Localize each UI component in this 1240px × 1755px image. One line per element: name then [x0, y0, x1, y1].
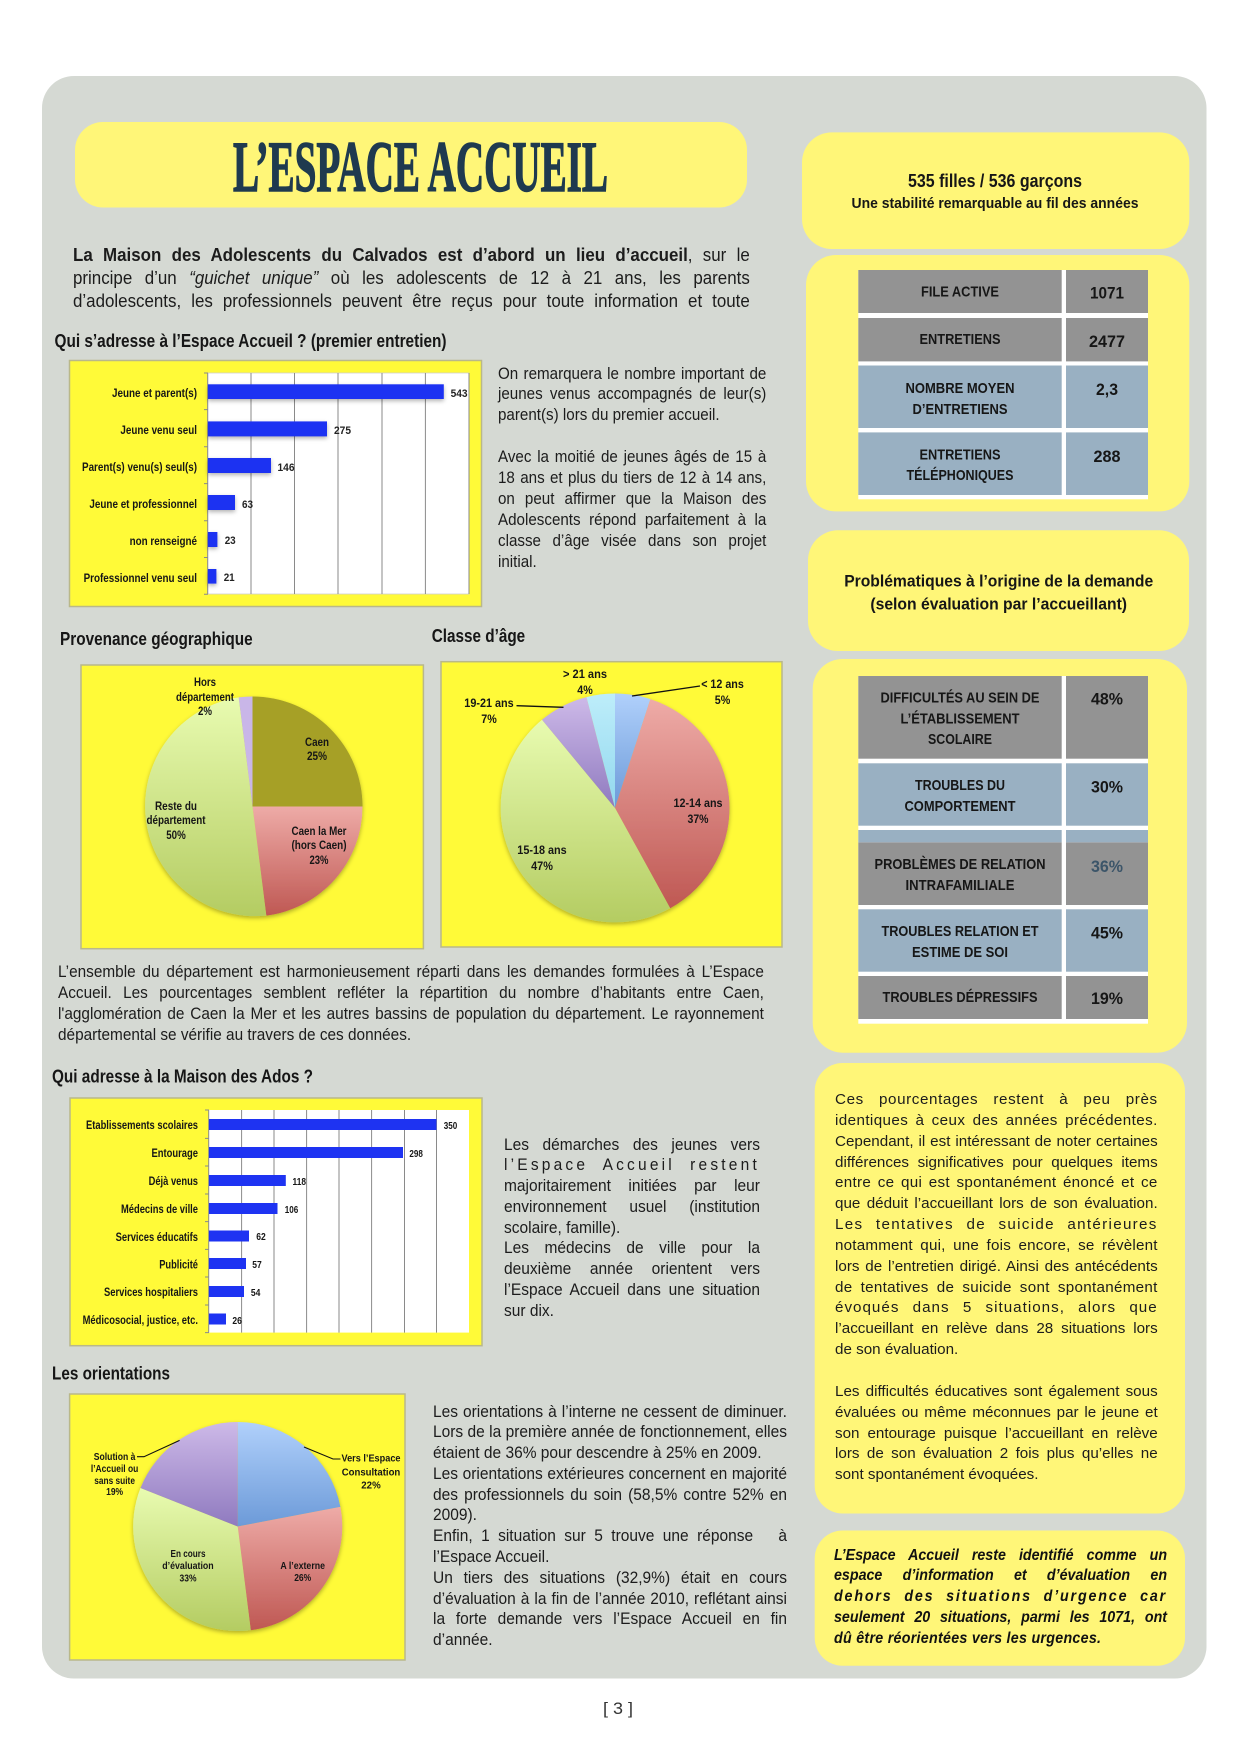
text: commentaire pourcentages: évoqués dans 5 situations, alors que: [835, 1299, 1158, 1316]
pie chart: classe d'age: 7%: [481, 712, 497, 726]
text: conclusion: dû être réorientées vers les urgences.: [834, 1630, 1101, 1647]
text: introduction: La Maison des Adolescents du Calvados est d’abord un lieu d’accueil, sur le: [72, 245, 749, 265]
pie chart: classe d'age: [441, 662, 782, 947]
text: orientations: d’évaluation à la fin de l’année 2010, reflétant ainsi: [433, 1590, 787, 1608]
text: commentaire pourcentages: Les tentatives de suicide antérieures: [835, 1216, 1158, 1233]
panel: chiffres clés: 2477: [1089, 332, 1125, 351]
panel: tableau problématiques: 36%: [1091, 857, 1123, 876]
bar chart: qui adresse: 62: [256, 1232, 266, 1243]
pie chart: provenance: Reste du: [155, 799, 197, 813]
bar chart: qui s'adresse: 63: [242, 499, 253, 511]
panel: tableau problématiques: TROUBLES DU: [915, 777, 1005, 794]
heading: provenance: Provenance géographique: [60, 629, 253, 649]
pie chart: provenance: Hors: [194, 675, 216, 689]
text: commentaire accompagnés: jeunes venus accompagnés de leur(s): [498, 385, 766, 403]
text: commentaire pourcentages: notamment qui, une fois encore, se révèlent: [835, 1237, 1158, 1254]
bar chart: qui adresse: [70, 1098, 482, 1346]
pie chart: orientations: Consultation: [342, 1468, 400, 1478]
pie chart: provenance: département: [176, 690, 234, 704]
text: orientations: d’année.: [433, 1631, 493, 1649]
bar chart: qui adresse: 118: [292, 1177, 306, 1188]
text: introduction: d’adolescents, les professionnels peuvent être reçus pour toute information et toute: [72, 291, 749, 311]
text: commentaire pourcentages: son entourage puisque l’accueillant en relève: [835, 1424, 1158, 1442]
text: commentaire pourcentages: différences significatives pour quelques items: [835, 1154, 1158, 1171]
bar chart: qui s'adresse: Jeune et parent(s): [112, 386, 197, 400]
text: commentaire pourcentages: évaluées ou même méconnues par le jeune et: [835, 1404, 1158, 1421]
pie chart: orientations: 26%: [294, 1573, 311, 1584]
panel: chiffres clés: [806, 255, 1189, 511]
panel: chiffres clés: TÉLÉPHONIQUES: [906, 467, 1014, 484]
bar chart: qui s'adresse: 543: [451, 388, 468, 400]
panel: commentaire: [815, 1063, 1185, 1514]
panel: tableau problématiques: COMPORTEMENT: [904, 798, 1016, 815]
pie chart: orientations: Solution à: [94, 1452, 136, 1463]
panel: chiffres clés: D’ENTRETIENS: [912, 401, 1008, 418]
bar chart: qui adresse: Médicosocial, justice, etc.: [83, 1313, 198, 1327]
text: commentaire accompagnés: Adolescents répond parfaitement à la: [498, 511, 766, 529]
pie chart: orientations: Vers l’Espace: [342, 1454, 401, 1464]
text: commentaire accompagnés: initial.: [498, 553, 536, 571]
pie chart: orientations: 33%: [180, 1574, 197, 1584]
pie chart: orientations: l’Accueil ou: [91, 1464, 138, 1475]
panel: chiffres clés: ENTRETIENS: [920, 331, 1000, 348]
bar chart: qui adresse: 57: [252, 1260, 262, 1271]
text: commentaire pourcentages: de tentatives de suicide sont spontanément: [835, 1279, 1158, 1296]
panel: problématiques titre: (selon évaluation par l’accueillant): [870, 594, 1127, 614]
text: orientations: 2009).: [433, 1506, 477, 1524]
text: commentaire pourcentages: sont spontanément évoquées.: [835, 1466, 1038, 1483]
text: commentaire pourcentages: [835, 1091, 1158, 1483]
text: commentaire pourcentages: lors de son évaluation 2 fois plus qu’elles ne: [835, 1445, 1158, 1462]
pie chart: orientations: En cours: [170, 1549, 206, 1560]
bar chart: qui s'adresse: 275: [334, 425, 351, 437]
text: commentaire pourcentages: Cependant, il est intéressant de noter certaines: [835, 1133, 1158, 1150]
panel: tableau problématiques: [813, 659, 1187, 1053]
text: orientations: Les orientations extérieures concernent en majorité: [433, 1465, 787, 1483]
bar chart: qui adresse: Services hospitaliers: [104, 1285, 198, 1299]
pie chart: provenance: département: [146, 813, 206, 827]
text: démarches: environnement usuel (institution: [504, 1198, 760, 1216]
text: commentaire accompagnés: on peut affirmer que la Maison des: [498, 490, 766, 508]
bar chart: qui s'adresse: [70, 360, 482, 606]
text: orientations: Un tiers des situations (32,9%) était en cours: [433, 1569, 787, 1587]
bar chart: qui adresse: 54: [251, 1288, 261, 1299]
text: commentaire pourcentages: identiques à ceux des années précédentes.: [835, 1112, 1158, 1129]
bar chart: qui s'adresse: Professionnel venu seul: [84, 571, 197, 585]
page number: [ 3 ]: [603, 1699, 633, 1718]
text: démarches: scolaire, famille).: [504, 1219, 620, 1237]
panel: chiffres clés: FILE ACTIVE: [921, 284, 999, 300]
bar chart: qui s'adresse: non renseigné: [130, 534, 197, 548]
bar chart: qui s'adresse: 21: [224, 572, 235, 584]
panel: chiffres clés: 2,3: [1096, 380, 1118, 399]
panel: tableau problématiques: PROBLÈMES DE RELATION: [874, 856, 1046, 873]
text: commentaire pourcentages: lors de l’entretien dirigé. Ainsi des antécédents: [835, 1258, 1158, 1275]
text: conclusion: espace d’information et d’évaluation en: [834, 1567, 1167, 1584]
text: commentaire pourcentages: que déduit l’accueillant lors de son évaluation.: [835, 1195, 1158, 1212]
text: démarches: sur dix.: [504, 1302, 554, 1320]
text: conclusion: seulement 20 situations, parmi les 1071, ont: [834, 1609, 1167, 1626]
pie chart: provenance: 50%: [166, 828, 186, 842]
bar chart: qui adresse: 106: [285, 1205, 299, 1216]
bar chart: qui adresse: Médecins de ville: [121, 1202, 198, 1216]
pie chart: orientations: [70, 1394, 405, 1660]
pie chart: orientations: 19%: [106, 1487, 123, 1498]
text: commentaire accompagnés: 18 ans et plus du tiers de 12 à 14 ans,: [498, 469, 766, 487]
text: conclusion: [834, 1547, 1168, 1647]
bar chart: qui s'adresse: 146: [278, 462, 294, 474]
bar chart: qui adresse: Services éducatifs: [116, 1230, 198, 1244]
text: département: départemental se vérifie au travers de ces données.: [58, 1026, 411, 1044]
text: orientations: Lors de la première année de fonctionnement, elles: [433, 1423, 787, 1441]
panel: tableau problématiques: 19%: [1091, 989, 1123, 1008]
panel: filles garçons: Une stabilité remarquable au fil des années: [852, 196, 1138, 212]
pie chart: provenance: 23%: [310, 853, 329, 867]
text: introduction: principe d’un “guichet unique” où les adolescents de 12 à 21 ans, les parents: [72, 268, 749, 288]
panel: tableau problématiques: TROUBLES DÉPRESSIFS: [882, 989, 1038, 1006]
text: commentaire accompagnés: [498, 364, 766, 571]
text: commentaire accompagnés: parent(s) lors du premier accueil.: [498, 406, 719, 424]
pie chart: provenance: Caen: [305, 735, 329, 749]
heading: les orientations: Les orientations: [52, 1364, 170, 1384]
bar chart: qui adresse: 350: [444, 1121, 458, 1132]
text: commentaire accompagnés: Avec la moitié de jeunes âgés de 15 à: [498, 448, 766, 466]
pie chart: classe d'age: 15-18 ans: [517, 843, 567, 857]
bar chart: qui s'adresse: Parent(s) venu(s) seul(s): [82, 460, 197, 474]
panel: tableau problématiques: 48%: [1091, 690, 1123, 708]
text: commentaire pourcentages: de son évaluation.: [835, 1341, 958, 1358]
panel: problématiques titre: [808, 530, 1189, 651]
text: démarches: deuxième année orientent vers: [504, 1260, 760, 1278]
pie chart: classe d'age: 19-21 ans: [464, 696, 514, 710]
pie chart: classe d'age: 5%: [715, 693, 731, 707]
panel: tableau problématiques: SCOLAIRE: [928, 731, 992, 748]
title banner: [75, 122, 747, 208]
panel: tableau problématiques: ESTIME DE SOI: [912, 944, 1008, 961]
text: orientations: Enfin, 1 situation sur 5 trouve une réponse à: [433, 1527, 787, 1545]
panel: tableau problématiques: TROUBLES RELATION ET: [882, 923, 1038, 940]
pie chart: classe d'age: 47%: [531, 859, 553, 873]
pie chart: classe d'age: > 21 ans: [563, 667, 607, 681]
text: conclusion: dehors des situations d’urgence car: [834, 1588, 1167, 1605]
text: introduction: [72, 245, 750, 311]
text: commentaire accompagnés: On remarquera le nombre important de: [498, 364, 766, 382]
bar chart: qui adresse: Publicité: [159, 1258, 198, 1272]
panel: chiffres clés: 1071: [1090, 284, 1124, 302]
pie chart: provenance: 2%: [198, 704, 212, 718]
heading: classe d'age: Classe d’âge: [432, 626, 525, 646]
panel: tableau problématiques: 30%: [1091, 778, 1123, 796]
text: démarches: Les médecins de ville pour la: [504, 1239, 760, 1257]
heading: qui adresse: Qui adresse à la Maison des Ados ?: [52, 1066, 313, 1086]
text: commentaire accompagnés: classe d’âge visée dans son projet: [498, 532, 766, 550]
text: orientations: Les orientations à l’interne ne cessent de diminuer.: [433, 1402, 787, 1420]
panel: conclusion: [815, 1530, 1185, 1666]
pie chart: orientations: sans suite: [94, 1476, 135, 1487]
text: conclusion: L’Espace Accueil reste identifié comme un: [834, 1547, 1167, 1564]
pie chart: classe d'age: 4%: [577, 683, 593, 697]
pie chart: orientations: 22%: [361, 1480, 381, 1492]
text: orientations: l’Espace Accueil.: [433, 1548, 549, 1566]
text: département: [58, 962, 764, 1044]
pie chart: provenance: 25%: [307, 749, 327, 763]
pie chart: classe d'age: < 12 ans: [701, 677, 744, 691]
title banner: L’ESPACE ACCUEIL: [233, 127, 608, 207]
bar chart: qui adresse: Déjà venus: [149, 1174, 198, 1188]
pie chart: provenance: [81, 665, 423, 949]
bar chart: qui adresse: Entourage: [152, 1146, 198, 1160]
panel: chiffres clés: ENTRETIENS: [920, 446, 1000, 464]
text: démarches: l’Espace Accueil restent: [504, 1156, 760, 1174]
pie chart: classe d'age: 12-14 ans: [674, 796, 723, 810]
bar chart: qui s'adresse: 23: [225, 535, 236, 547]
text: orientations: [433, 1402, 787, 1649]
text: orientations: étaient de 36% pour descendre à 25% en 2009.: [433, 1444, 762, 1462]
panel: chiffres clés: 288: [1094, 447, 1120, 466]
text: orientations: des professionnels du soin (58,5% contre 52% en: [433, 1486, 787, 1504]
bar chart: qui s'adresse: Jeune venu seul: [120, 423, 197, 437]
text: département: Accueil. Les pourcentages semblent refléter la répartition du nombre d’habitants entre Caen,: [58, 984, 764, 1002]
pie chart: provenance: (hors Caen): [292, 838, 346, 852]
text: département: l'agglomération de Caen la Mer et les autres bassins de population du département. Le rayonnement: [58, 1004, 764, 1022]
bar chart: qui adresse: 298: [409, 1149, 423, 1160]
bar chart: qui adresse: Etablissements scolaires: [86, 1118, 198, 1132]
text: démarches: majoritairement initiées par leur: [504, 1177, 760, 1195]
text: commentaire pourcentages: Les difficultés éducatives sont également sous: [835, 1383, 1158, 1400]
pie chart: classe d'age: 37%: [688, 812, 709, 826]
panel: tableau problématiques: DIFFICULTÉS AU SEIN DE: [880, 690, 1040, 706]
text: commentaire pourcentages: l’accueillant en relève dans 28 situations lors: [835, 1320, 1158, 1337]
text: département: L’ensemble du département est harmonieusement réparti dans les demandes formulées à L’Espace: [58, 962, 764, 980]
panel: problématiques titre: Problématiques à l’origine de la demande: [844, 572, 1153, 590]
text: commentaire pourcentages: Ces pourcentages restent à peu près: [835, 1091, 1158, 1108]
panel: filles garçons: [802, 132, 1189, 249]
panel: tableau problématiques: INTRAFAMILIALE: [906, 877, 1014, 894]
heading: qui s'adresse: Qui s’adresse à l’Espace Accueil ? (premier entretien): [54, 331, 446, 351]
text: démarches: Les démarches des jeunes vers: [504, 1136, 760, 1154]
text: commentaire pourcentages: entre ce qui est spontanément énoncé et ce: [835, 1174, 1158, 1191]
pie chart: orientations: A l’externe: [280, 1561, 325, 1572]
pie chart: provenance: Caen la Mer: [292, 824, 347, 838]
panel: chiffres clés: NOMBRE MOYEN: [906, 380, 1014, 397]
text: orientations: la forte demande vers l’Espace Accueil en fin: [433, 1610, 787, 1628]
bar chart: qui s'adresse: Jeune et professionnel: [89, 497, 197, 511]
panel: tableau problématiques: 45%: [1091, 924, 1123, 942]
text: démarches: l’Espace Accueil dans une situation: [504, 1281, 760, 1299]
pie chart: orientations: d’évaluation: [162, 1561, 214, 1572]
text: démarches: [504, 1136, 760, 1320]
panel: tableau problématiques: L’ÉTABLISSEMENT: [900, 710, 1020, 728]
bar chart: qui adresse: 26: [232, 1316, 242, 1327]
panel: filles garçons: 535 filles / 536 garçons: [908, 171, 1082, 191]
